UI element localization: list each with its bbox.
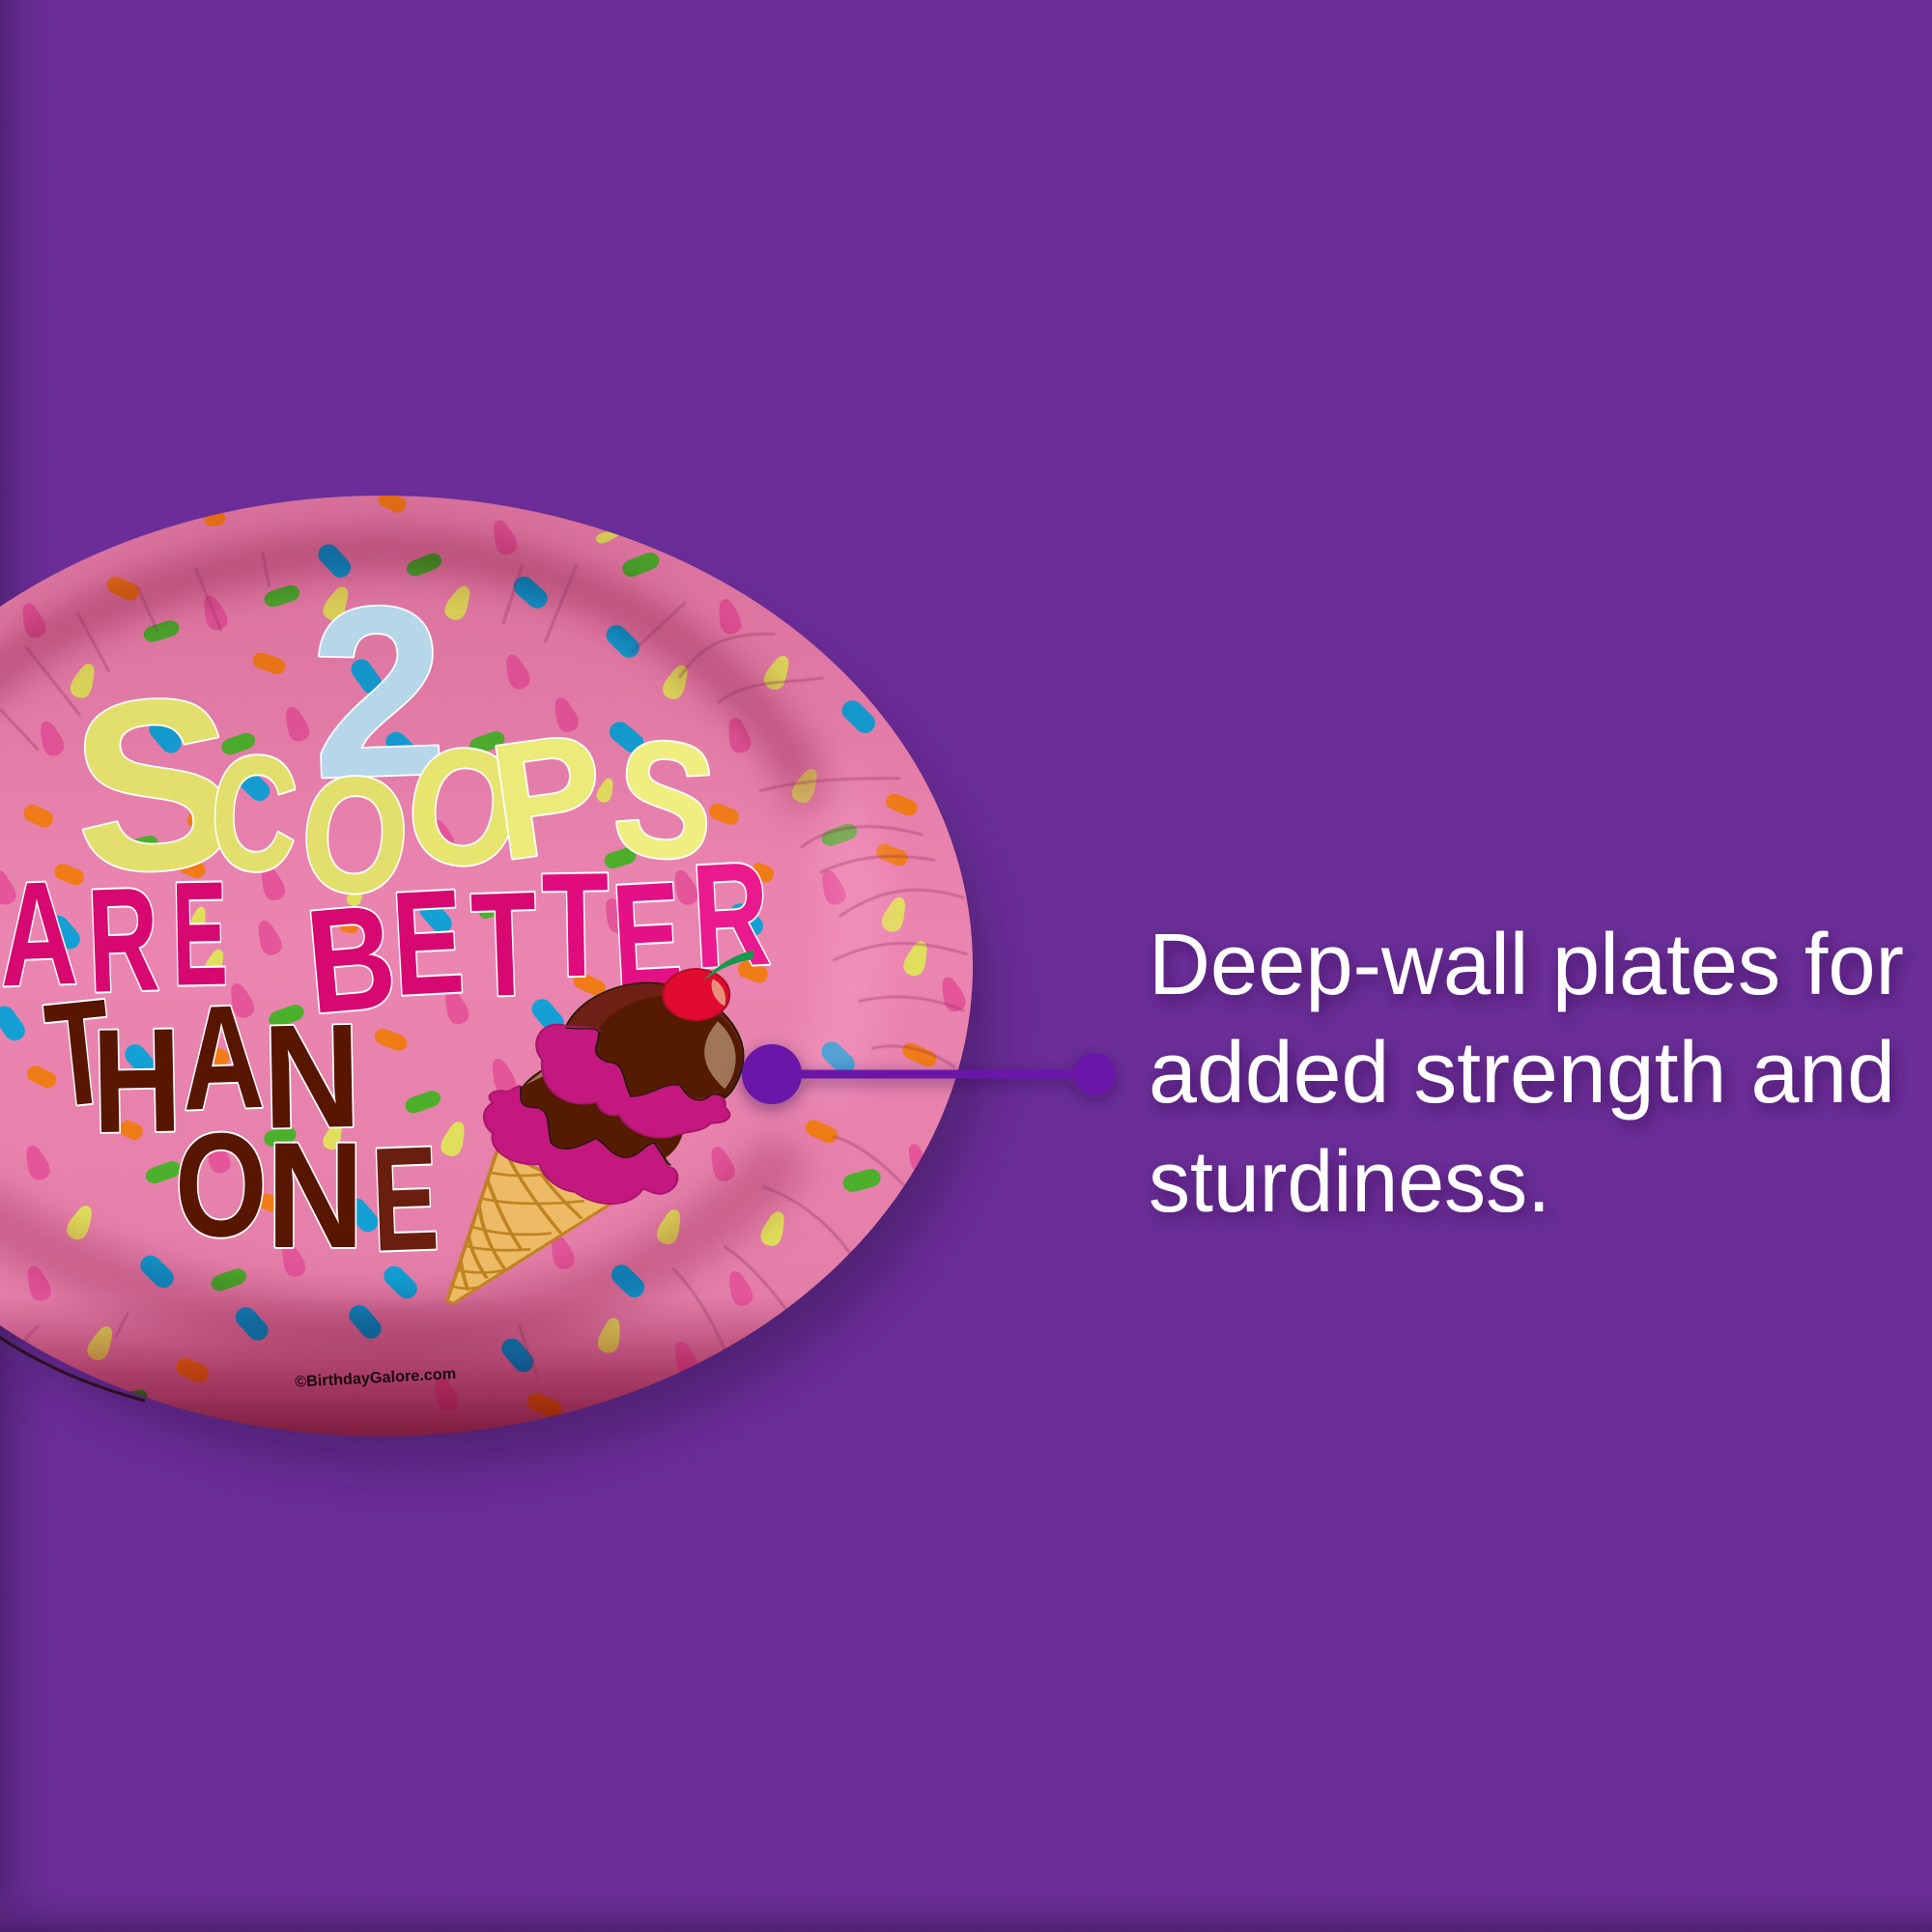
word: than: A bbox=[179, 974, 267, 1141]
chocolate highlight bbox=[704, 1021, 736, 1089]
plate drop shadow bbox=[0, 551, 990, 1468]
word: Scoops: S bbox=[64, 645, 244, 925]
top drip outline bbox=[565, 1028, 725, 1100]
word: one: O bbox=[175, 1103, 268, 1267]
word: Scoops bbox=[64, 645, 724, 930]
words: are better: T bbox=[469, 862, 540, 1029]
bottom rim darkening bbox=[0, 496, 875, 1436]
word: Scoops: P bbox=[481, 698, 615, 895]
callout text: Deep-wall plates for bbox=[1149, 917, 1904, 1013]
plate base bbox=[0, 493, 985, 1439]
cherry bbox=[663, 950, 753, 1020]
plate shading bbox=[0, 493, 985, 1439]
word: Scoops: O bbox=[396, 708, 533, 905]
word: than: H bbox=[91, 997, 183, 1164]
inner wall shadow bbox=[0, 551, 821, 811]
paper plate bbox=[0, 489, 985, 1439]
lower wall shadow bbox=[0, 1150, 792, 1323]
word: Scoops: S bbox=[606, 703, 724, 896]
end dot bbox=[1073, 1053, 1116, 1095]
callout connector bbox=[742, 1044, 1116, 1104]
word: Scoops: C bbox=[206, 721, 302, 907]
connector line bbox=[797, 1070, 1096, 1078]
words: are better bbox=[0, 832, 774, 1045]
word: than bbox=[39, 968, 362, 1164]
orange sprinkles bbox=[21, 489, 940, 1421]
words: are better: R bbox=[85, 858, 161, 1024]
lower pink scoop bbox=[484, 1086, 677, 1204]
word: Scoops: O bbox=[296, 740, 415, 930]
plate lettering bbox=[0, 554, 774, 1391]
callout text: added strength and bbox=[1149, 1025, 1895, 1122]
words: are better: R bbox=[689, 832, 774, 1000]
right wall highlight bbox=[821, 773, 858, 1092]
blue sprinkles bbox=[0, 540, 879, 1377]
copyright text: ©BirthdayGalore.com bbox=[295, 1365, 457, 1391]
word: one: E bbox=[369, 1115, 441, 1283]
callout text: sturdiness. bbox=[1149, 1134, 1550, 1231]
top chocolate scoop bbox=[547, 982, 744, 1108]
anchor dot on plate bbox=[742, 1044, 802, 1104]
yellow sprinkles bbox=[64, 527, 932, 1363]
waffle cone bbox=[447, 1150, 610, 1303]
ice cream cone illustration bbox=[447, 950, 753, 1303]
cherry stem bbox=[702, 950, 753, 982]
callout text bbox=[1149, 917, 1904, 1231]
lower chocolate scoop bbox=[514, 1056, 690, 1166]
word: one bbox=[175, 1103, 441, 1283]
pink sprinkles bbox=[0, 517, 969, 1413]
word: one: N bbox=[267, 1112, 364, 1280]
word: than: T bbox=[39, 968, 120, 1139]
lower drip outline bbox=[521, 1087, 670, 1166]
words: are better: E bbox=[609, 850, 686, 1019]
word: than: N bbox=[262, 993, 362, 1160]
words: are better: B bbox=[300, 873, 402, 1045]
top pink scoop bbox=[536, 1025, 729, 1138]
rim creases bbox=[0, 553, 968, 1381]
lower highlight bbox=[526, 1069, 549, 1085]
words: are better: E bbox=[171, 852, 229, 1017]
lower chocolate drip bbox=[521, 1065, 684, 1159]
words: are better: T bbox=[541, 841, 611, 1008]
top chocolate glaze bbox=[589, 995, 742, 1101]
green sprinkles bbox=[125, 550, 883, 1406]
words: are better: E bbox=[388, 860, 468, 1027]
numeral 2: 2 bbox=[306, 554, 450, 830]
plate underside edge bbox=[0, 1331, 145, 1401]
sprinkles bbox=[0, 489, 969, 1421]
